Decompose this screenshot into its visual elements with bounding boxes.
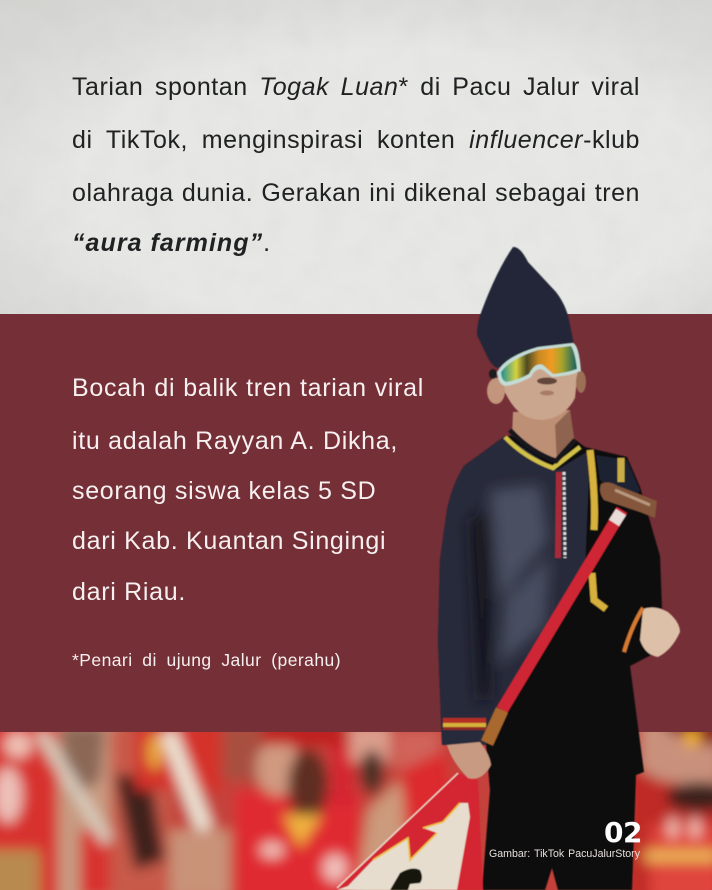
left hand — [447, 742, 491, 779]
collar trim — [505, 437, 580, 468]
jacket and trousers silhouette — [438, 432, 662, 890]
hat — [477, 247, 574, 368]
image credit: Gambar: TikTok PacuJalurStory — [489, 848, 640, 860]
text block: intro paragraph: “aura farming”. — [72, 229, 271, 257]
text block: intro paragraph: di TikTok, menginspirasi konten influencer-klub — [72, 126, 640, 154]
text block: the boy behind the trend: dari Riau. — [72, 578, 186, 606]
text block: the boy behind the trend — [72, 374, 424, 606]
left cuff — [443, 718, 486, 723]
text block: intro paragraph: Tarian spontan Togak Luan* di Pacu Jalur viral — [72, 73, 640, 101]
neck — [512, 410, 574, 464]
placket trim — [558, 472, 559, 558]
flag — [337, 773, 483, 890]
text block: the boy behind the trend: itu adalah Rayyan A. Dikha, — [72, 427, 398, 455]
text block: intro paragraph: olahraga dunia. Gerakan ini dikenal sebagai tren — [72, 179, 640, 207]
stick — [502, 510, 622, 710]
panel: maroon band — [0, 314, 712, 732]
face — [497, 362, 578, 420]
text block: the boy behind the trend: seorang siswa kelas 5 SD — [72, 477, 376, 505]
panel: paper texture background — [0, 0, 712, 314]
footnote: *Penari di ujung Jalur (perahu) — [72, 650, 341, 670]
text block: the boy behind the trend: dari Kab. Kuantan Singingi — [72, 527, 386, 555]
left sleeve and torso, navy satin — [438, 436, 590, 746]
text block: intro paragraph — [72, 73, 640, 257]
page number: 02 — [604, 816, 642, 849]
goggles — [497, 343, 581, 386]
right shoulder navy — [596, 455, 640, 510]
hammer head — [600, 482, 657, 518]
text block: the boy behind the trend: Bocah di balik tren tarian viral — [72, 374, 424, 402]
photo: boy in traditional black costume with goggles — [336, 246, 681, 890]
right hand — [640, 608, 680, 657]
